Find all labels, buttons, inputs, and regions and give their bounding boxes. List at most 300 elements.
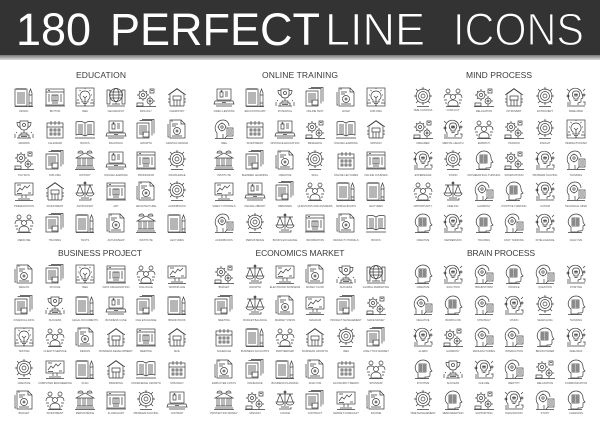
icon: investment: INVESTMENT — [247, 141, 264, 145]
icon: legal documents — [72, 296, 98, 322]
icon: branding: BRANDING — [109, 381, 123, 385]
icon: strategy — [475, 296, 493, 322]
icon: strategy — [169, 361, 185, 385]
icon: plan: PLAN — [82, 381, 89, 385]
icon: insight: INSIGHT — [540, 141, 551, 145]
icon: contract: CONTRACT — [308, 411, 323, 415]
icon: dreamer — [413, 121, 433, 145]
icon: introvert: INTROVERT — [507, 109, 522, 113]
icon: online lectures: ONLINE LECTURES — [334, 173, 358, 177]
icon: profile — [506, 265, 523, 289]
icon: authorship: AUTHORSHIP — [107, 238, 125, 242]
icon: video tutorials — [212, 183, 236, 208]
icon: question: QUESTION — [538, 285, 552, 289]
icon: protection money — [210, 391, 238, 415]
icon: plan — [76, 360, 94, 385]
icon: economic trends — [333, 361, 359, 385]
icon: persistence — [75, 391, 95, 415]
icon: diagram — [306, 297, 324, 322]
icon: institute — [214, 151, 234, 177]
icon: online library — [244, 183, 266, 208]
icon: protection money: PROTECTION MONEY — [210, 411, 238, 415]
icon: time management: TIME MANAGEMENT — [410, 411, 436, 415]
icon: business accounts: BUSINESS ACCOUNTS — [241, 349, 269, 353]
icon: electronic business: ELECTRONIC BUSINESS — [270, 285, 301, 289]
icon: autism — [536, 182, 554, 208]
icon: budget balance: BUDGET BALANCE — [243, 318, 267, 322]
icon: business planning — [271, 360, 299, 385]
icon: books exchange: BOOKS EXCHANGE — [273, 238, 298, 242]
icon: market vision: MARKET VISION — [275, 318, 295, 322]
icon: contract — [306, 390, 323, 415]
icon: investment — [247, 121, 264, 145]
icon: computer engineering — [38, 361, 72, 385]
icon: somatization — [504, 152, 524, 177]
icon: budget balance — [243, 296, 267, 322]
icon: mission: MISSION — [371, 141, 382, 145]
icon: presentation — [14, 183, 34, 208]
icon: analysis: ANALYSIS — [309, 381, 322, 385]
icon: webinars — [276, 182, 293, 208]
icon: skill — [306, 150, 324, 177]
icon: conflict: CONFLICT — [447, 108, 460, 112]
icon: passion: PASSION — [508, 141, 520, 145]
icon: make money — [366, 297, 386, 322]
icon: astronomy: ASTRONOMY — [77, 204, 94, 208]
icon: time management — [410, 390, 436, 415]
icon: profile: PROFILE — [508, 285, 520, 289]
icon: institute: INSTITUTE — [139, 238, 153, 242]
icon: training: TRAINING — [49, 238, 61, 242]
icon: relaxation — [474, 89, 494, 113]
icon: vision — [505, 296, 523, 322]
icon: books — [75, 121, 95, 145]
icon: fast thinking — [504, 214, 524, 242]
icon: extrovert — [536, 87, 554, 113]
icon: investment — [46, 392, 64, 415]
panel: education — [14, 70, 188, 242]
icon: books — [366, 215, 386, 242]
icon: identity: IDENTITY — [508, 381, 520, 385]
icon: remuneration — [443, 391, 464, 415]
icon: free mind: FREE MIND — [569, 109, 583, 113]
icon: negative — [414, 296, 432, 322]
icon: chemistry — [168, 88, 186, 113]
icon: content — [167, 392, 187, 415]
title: PERFECT — [110, 4, 320, 55]
icon: workflow: WORKFLOW — [445, 318, 461, 322]
icon: data organization: DATA ORGANIZATION — [103, 285, 129, 289]
icon: positive — [567, 265, 585, 289]
icon: intelligence — [536, 214, 555, 242]
icon: manufacturing — [473, 328, 495, 353]
icon: growth: GROWTH — [140, 141, 152, 145]
icon: schedule — [216, 329, 232, 353]
icon: dialogue — [137, 266, 155, 289]
icon: analysis — [306, 360, 323, 385]
icon: online test — [306, 88, 324, 113]
icon: lectures: LECTURES — [369, 204, 383, 208]
icon: business accounts — [241, 328, 269, 353]
icon: exam: EXAM — [342, 109, 350, 113]
icon: questions and answers: QUESTIONS AND ANSWERS — [297, 204, 333, 208]
icon: opportunity — [414, 183, 433, 208]
icon: online learning — [334, 121, 358, 145]
icon: skill: SKILL — [311, 173, 319, 177]
panel: mind process — [413, 70, 587, 242]
icon: knowledge growth — [131, 361, 161, 385]
icon: idea: IDEA — [82, 285, 88, 289]
icon: failure: FAILURE — [479, 381, 490, 385]
icon: meeting — [215, 296, 232, 322]
panel: economics market — [210, 248, 389, 415]
icon: positive: POSITIVE — [570, 285, 582, 289]
icon: workflow — [445, 296, 462, 322]
icon: online test: ONLINE TEST — [307, 109, 324, 113]
icon: free mind — [567, 88, 585, 113]
icon: choice: CHOICE — [280, 411, 290, 415]
icon: perfectionism: PERFECTIONISM — [565, 141, 587, 145]
title — [16, 4, 584, 55]
icon: physics: PHYSICS — [18, 173, 30, 177]
icon: conflict — [444, 89, 462, 112]
icon: medicine: MEDICINE — [18, 238, 31, 242]
icon: problem solving — [533, 151, 557, 177]
icon: art — [106, 183, 126, 208]
icon: chemistry: CHEMISTRY — [169, 109, 185, 113]
panel: brain process — [410, 248, 587, 415]
icon: vision: VISION — [449, 173, 458, 177]
icon: wealth: WEALTH — [19, 285, 29, 289]
icon: financial data — [14, 296, 35, 322]
icon: budget: BUDGET — [19, 411, 30, 415]
icon: technical mind: TECHNICAL MIND — [565, 204, 587, 208]
icon: analysis — [568, 214, 585, 242]
icon: harmony: HARMONY — [477, 204, 491, 208]
icon: imagination — [505, 391, 523, 415]
icon: tests: TESTS — [81, 238, 89, 242]
icon: file exchange — [136, 296, 157, 322]
icon: sponsor: SPONSOR — [370, 381, 383, 385]
icon: audiobooks: AUDIOBOOKS — [168, 204, 186, 208]
icon: lectures — [367, 182, 385, 208]
icon: mobile books — [336, 182, 356, 208]
icon: architecture — [136, 182, 156, 208]
icon: money flow — [306, 265, 324, 289]
icon: brainstorm — [475, 265, 493, 289]
icon: depression: DEPRESSION — [444, 238, 462, 242]
icon: failure — [475, 360, 493, 385]
icon: study — [536, 391, 554, 415]
icon: idea — [76, 88, 94, 113]
icon: relaxation — [535, 361, 555, 385]
icon: negative: NEGATIVE — [417, 318, 430, 322]
icon: money flow: MONEY FLOW — [306, 285, 324, 289]
icon: pencil — [15, 88, 33, 113]
icon: knowledge growth: KNOWLEDGE GROWTH — [131, 381, 161, 385]
icon: business growth — [302, 328, 328, 353]
icon: empathy: EMPATHY — [478, 141, 490, 145]
icon: fast thinking: FAST THINKING — [504, 238, 524, 242]
icon: geography: GEOGRAPHY — [108, 109, 125, 113]
title: 180 — [16, 4, 91, 55]
icon: creative: CREATIVE — [279, 173, 292, 177]
icon: mathematical thinking: MATHEMATICAL THINKING — [468, 173, 500, 177]
icon: calendar — [47, 121, 63, 145]
icon: investment: INVESTMENT — [47, 411, 64, 415]
icon: problem solving: PROBLEM SOLVING — [134, 411, 158, 415]
icon: audiobooks — [215, 214, 233, 242]
icon: mobile books: MOBILE BOOKS — [336, 204, 356, 208]
icon: time control: TIME CONTROL — [413, 108, 433, 112]
icon: books exchange — [273, 214, 298, 242]
icon: growth: GROWTH — [249, 285, 261, 289]
icon: design: DESIGN — [80, 349, 90, 353]
icon: institute — [136, 214, 156, 242]
icon: mission: MISSION — [250, 411, 261, 415]
icon: positive thinking: POSITIVE THINKING — [501, 204, 527, 208]
icon: biology: BIOLOGY — [140, 109, 152, 113]
icon: market vision — [275, 296, 295, 322]
icon: project management — [330, 296, 362, 322]
icon: books: BOOKS — [371, 238, 381, 242]
icon: blended learning — [242, 150, 268, 177]
icon: autism: AUTISM — [540, 204, 550, 208]
header banner — [0, 0, 600, 60]
icon: distance education — [271, 121, 299, 145]
icon: income: INCOME — [371, 411, 381, 415]
icon: insurance: INSURANCE — [247, 381, 263, 385]
icon: pencil: PENCIL — [19, 109, 29, 113]
icon: professor: PROFESSOR — [138, 173, 154, 177]
icon: mental health — [442, 120, 464, 145]
title: LINE — [325, 4, 425, 55]
heading: brain process: BRAIN PROCESS — [467, 248, 535, 258]
icon: blended learning: BLENDED LEARNING — [242, 173, 268, 177]
icon: creative — [415, 214, 432, 242]
heading: online training: ONLINE TRAINING — [262, 70, 338, 80]
icon: geography — [107, 88, 125, 113]
icon: clients service — [43, 329, 67, 353]
icon: physics — [14, 152, 34, 177]
icon: graphic design: GRAPHIC DESIGN — [166, 141, 188, 145]
icon: charging — [568, 391, 585, 415]
icon: intuitive — [415, 360, 432, 385]
icon: persistence: PERSISTENCE — [76, 411, 94, 415]
heading: mind process: MIND PROCESS — [466, 70, 532, 80]
icon: manufacturing: MANUFACTURING — [473, 349, 495, 353]
icon: success — [444, 361, 462, 385]
icon: vision: VISION — [510, 318, 519, 322]
icon: harmony — [443, 329, 463, 353]
icon: diagram: DIAGRAM — [309, 318, 321, 322]
icon: financial data: FINANCIAL DATA — [14, 318, 35, 322]
icon: online courses: ONLINE COURSES — [364, 173, 388, 177]
icon: training — [476, 214, 493, 242]
icon: invoice: INVOICE — [50, 285, 61, 289]
icon: research: RESEARCH — [308, 141, 322, 145]
icon: backpack — [106, 121, 126, 145]
heading: business project: BUSINESS PROJECT — [58, 248, 142, 258]
icon: video lessons: VIDEO LESSONS — [213, 109, 235, 113]
icon: feelings: FEELINGS — [570, 349, 583, 353]
icon: history: HISTORY — [79, 173, 91, 177]
icon: legal documents: LEGAL DOCUMENTS — [72, 318, 98, 322]
icon: mathematical thinking — [468, 151, 500, 177]
icon: employee costs — [212, 360, 236, 385]
icon: opportunity: OPPORTUNITY — [414, 204, 433, 208]
icon: brand book: BRAND BOOK — [168, 318, 186, 322]
panel: online training — [212, 70, 388, 242]
icon: clients service: CLIENTS SERVICE — [43, 349, 67, 353]
icon: global marketing: GLOBAL MARKETING — [363, 285, 389, 289]
icon: mail — [168, 328, 186, 353]
icon: video tutorials: VIDEO TUTORIALS — [212, 204, 236, 208]
icon: information — [305, 215, 325, 242]
icon: dreamer: DREAMER — [417, 141, 430, 145]
icon: question — [536, 265, 554, 289]
icon: alarm: ALARM — [419, 349, 427, 353]
icon: partnership — [276, 329, 294, 353]
icon: success: SUCCESS — [340, 285, 353, 289]
icon: vision — [444, 150, 462, 177]
icon: intelligence: INTELLIGENCE — [536, 238, 555, 242]
icon: searching: SEARCHING — [537, 318, 553, 322]
icon: content: CONTENT — [171, 411, 184, 415]
icon: analysis: ANALYSIS — [570, 238, 583, 242]
icon: success — [46, 297, 64, 322]
icon: workplace: WORKPLACE — [169, 285, 186, 289]
icon: feeling — [444, 182, 462, 208]
icon: mail: MAIL — [174, 349, 181, 353]
icon: technical mind — [565, 182, 587, 208]
icon: brand book — [168, 296, 186, 322]
icon: choice — [276, 391, 294, 415]
icon: knowledge: KNOWLEDGE — [169, 173, 186, 177]
icon: flowchart — [106, 392, 126, 415]
icon: electronic business — [270, 266, 301, 289]
icon: business planning: BUSINESS PLANNING — [271, 381, 299, 385]
icon: online library: ONLINE LIBRARY — [244, 204, 266, 208]
icon: data organization — [103, 266, 129, 289]
icon: meeting: MEETING — [140, 349, 152, 353]
icon: exam — [337, 88, 354, 113]
icon: success: SUCCESS — [447, 381, 460, 385]
title: ICONS — [453, 4, 584, 55]
icon: online learning: ONLINE LEARNING — [104, 173, 128, 177]
icon: budget: BUDGET — [219, 285, 230, 289]
icon: questions and answers — [297, 183, 333, 208]
icon: empathy — [475, 121, 493, 145]
icon: alarm — [414, 328, 432, 353]
icon: idea — [76, 265, 94, 289]
heading: economics market: ECONOMICS MARKET — [256, 248, 344, 258]
icon: passion — [504, 121, 524, 145]
icon: creative — [415, 265, 432, 289]
icon: audiobooks — [168, 181, 186, 208]
icon: potential — [276, 89, 294, 113]
icon: thinking — [568, 296, 585, 322]
icon: feelings — [567, 328, 585, 353]
icon: market forecast — [333, 392, 359, 415]
icon: authorship — [107, 214, 125, 242]
icon: mission — [367, 120, 385, 145]
icon: diploma: DIPLOMA — [370, 109, 382, 113]
icon: positive thinking — [501, 182, 527, 208]
icon: invoice — [46, 264, 63, 289]
icon: design tutorials — [333, 214, 359, 242]
icon: somatization: SOMATIZATION — [504, 173, 524, 177]
icon: time control — [413, 87, 433, 112]
icon: online learning — [104, 152, 128, 177]
icon: education app: EDUCATION APP — [245, 109, 266, 113]
icon: file exchange: FILE EXCHANGE — [136, 318, 157, 322]
icon: awards — [15, 121, 33, 145]
icon: mental health: MENTAL HEALTH — [442, 141, 464, 145]
icon: branding — [107, 360, 125, 385]
icon: art: ART — [113, 204, 119, 208]
icon: dialogue: DIALOGUE — [139, 285, 153, 289]
icon: market forecast: MARKET FORECAST — [333, 411, 359, 415]
icon: idea — [215, 120, 233, 145]
icon: extrovert: EXTROVERT — [537, 109, 553, 113]
icon: insurance — [246, 360, 263, 385]
icon: success: SUCCESS — [49, 318, 62, 322]
icon: medicine — [15, 215, 33, 242]
icon: history — [75, 151, 95, 177]
icon: online courses — [364, 152, 388, 177]
icon: professor — [136, 152, 156, 177]
icon: architecture: ARCHITECTURE — [136, 204, 156, 208]
icon: growth — [246, 265, 264, 289]
icon: audiobooks: AUDIOBOOKS — [215, 238, 233, 242]
icon: design tutorials: DESIGN TUTORIALS — [333, 238, 359, 242]
icon: analytics market — [363, 328, 389, 353]
icon: diploma — [46, 150, 63, 177]
icon: employee costs: EMPLOYEE COSTS — [212, 381, 236, 385]
icon: training: TRAINING — [478, 238, 490, 242]
icon: meeting: MEETING — [218, 318, 230, 322]
icon: investment — [46, 182, 64, 208]
icon: idea: IDEA — [343, 349, 349, 353]
icon: success — [337, 266, 355, 289]
icon: make money: MAKE MONEY — [367, 318, 385, 322]
icon: brainstorm: BRAINSTORM — [475, 285, 493, 289]
icon: relaxation: RELAXATION — [476, 109, 492, 113]
icon: charging: CHARGING — [569, 411, 583, 415]
icon: business case — [106, 297, 127, 322]
icon: sponsor — [367, 361, 385, 385]
icon: solution — [444, 265, 462, 289]
icon: backpack: BACKPACK — [109, 141, 123, 145]
icon: mission — [245, 392, 265, 415]
icon: identity — [505, 360, 523, 385]
icon: experience — [414, 151, 432, 177]
icon: online learning: ONLINE LEARNING — [334, 141, 358, 145]
icon: study: STUDY — [541, 411, 550, 415]
icon: supporting — [474, 392, 494, 415]
icon: harmony — [475, 182, 493, 208]
icon: calendar: CALENDAR — [48, 141, 62, 145]
icon: thinking — [567, 151, 585, 177]
icon: budget — [15, 391, 32, 415]
icon: video lessons — [213, 89, 235, 113]
icon: perfectionism — [565, 120, 587, 145]
icon: presentation: PRESENTATION — [14, 204, 34, 208]
icon: income — [367, 391, 384, 415]
icon: design — [76, 328, 93, 353]
icon: economic trends: ECONOMIC TRENDS — [333, 381, 359, 385]
